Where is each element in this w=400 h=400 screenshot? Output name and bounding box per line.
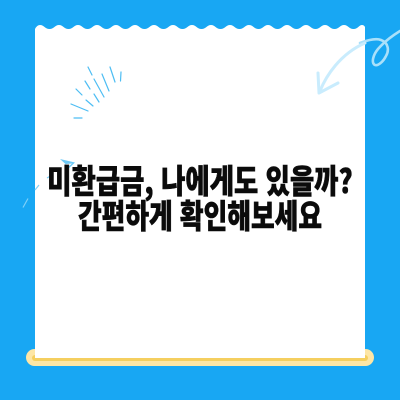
icon: burst lines bbox=[71, 67, 121, 118]
heading line 2: 간편하게 확인해보세요 bbox=[78, 190, 322, 238]
heading line 1: 미환급금, 나에게도 있을까? bbox=[47, 155, 353, 203]
white card with scalloped top bbox=[35, 25, 365, 358]
icon: paper plane with dashed trail bbox=[23, 159, 75, 208]
arrow: curly arrow top right bbox=[318, 31, 400, 93]
bottom yellow bar bbox=[26, 349, 374, 366]
